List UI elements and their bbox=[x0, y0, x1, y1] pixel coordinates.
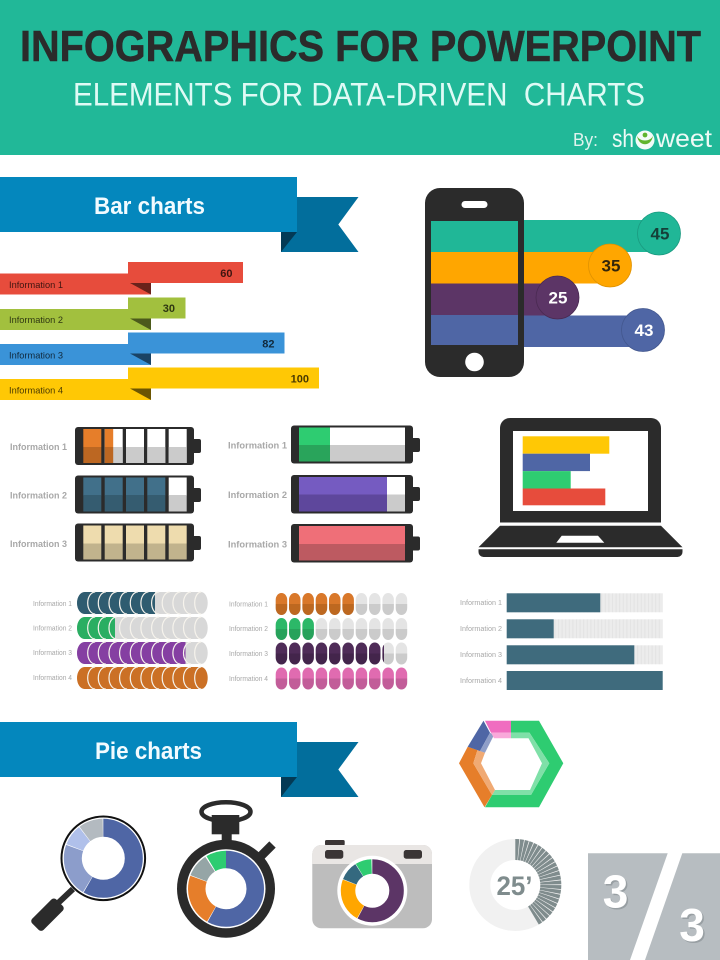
segment: orange bbox=[459, 747, 495, 807]
value 25: 25 bbox=[549, 288, 567, 308]
bar row 4 bbox=[507, 671, 663, 690]
label: Information 2 bbox=[33, 626, 72, 632]
label: Information 2 bbox=[460, 626, 502, 633]
cylinder row 2 bbox=[77, 617, 208, 639]
pill progress bars bbox=[229, 593, 407, 690]
byline: By: bbox=[573, 130, 598, 150]
label: Information 2 bbox=[228, 490, 287, 501]
bar: Information 3: Information 3 bbox=[9, 350, 63, 362]
pill row 1 bbox=[276, 593, 407, 615]
label: Information 1 bbox=[10, 442, 68, 453]
camera top button bbox=[325, 840, 345, 846]
bar: Information 4: 100 bbox=[291, 374, 309, 386]
lens bbox=[62, 816, 145, 900]
label: Information 1 bbox=[460, 600, 502, 607]
value 43 bbox=[622, 308, 664, 352]
phone body bbox=[425, 188, 524, 377]
lens ring bbox=[337, 856, 407, 926]
header band bbox=[0, 0, 720, 155]
stopwatch ring handle bbox=[202, 802, 250, 821]
bar: Information 3 bbox=[0, 332, 284, 365]
dial bbox=[186, 849, 266, 928]
battery: green bbox=[291, 426, 420, 464]
showeet logo: weet bbox=[655, 125, 712, 153]
label: Information 3 bbox=[33, 650, 72, 657]
camera donut bbox=[312, 840, 432, 928]
data bars bbox=[520, 220, 660, 347]
label: Information 3 bbox=[460, 652, 502, 659]
bar: Information 1: 60 bbox=[220, 268, 232, 280]
laptop display bbox=[513, 431, 648, 511]
battery: purple bbox=[291, 475, 420, 514]
laptop chart bbox=[478, 418, 682, 557]
page number: 3 bbox=[604, 867, 630, 919]
label: Information 3 bbox=[10, 539, 67, 550]
value 43: 43 bbox=[635, 321, 653, 340]
donut bbox=[197, 859, 255, 918]
pill row 3 bbox=[276, 642, 407, 664]
ribbon: Pie charts bbox=[0, 722, 358, 797]
segment: green bbox=[485, 721, 563, 807]
ribbon bar chart bbox=[0, 262, 319, 400]
handle bbox=[30, 889, 73, 932]
crown bbox=[212, 815, 239, 841]
battery: orange bbox=[75, 427, 201, 465]
stopwatch body bbox=[177, 840, 275, 938]
ribbon: Bar charts: Bar charts bbox=[94, 193, 205, 220]
side lever bbox=[258, 844, 272, 859]
donut bbox=[348, 866, 397, 915]
value 35 bbox=[588, 244, 632, 287]
value 45 bbox=[638, 212, 680, 255]
cylinder row 3 bbox=[77, 642, 208, 664]
ribbon: Pie charts: Pie charts bbox=[95, 738, 202, 765]
label: Information 4 bbox=[460, 678, 502, 685]
laptop base bbox=[478, 526, 682, 557]
label: Information 3 bbox=[228, 540, 287, 550]
value 35: 35 bbox=[602, 256, 620, 276]
value 45: 45 bbox=[651, 224, 669, 244]
cylinder row 1 bbox=[77, 592, 208, 614]
label: Information 3 bbox=[229, 651, 268, 658]
bar row 3 bbox=[507, 645, 663, 664]
label: Information 1 bbox=[33, 601, 72, 608]
bar: Information 2: 30 bbox=[163, 303, 175, 315]
pill row 4 bbox=[276, 668, 407, 690]
page number: 3 bbox=[679, 899, 705, 951]
bar: Information 2: Information 2 bbox=[9, 315, 63, 326]
value 25 bbox=[536, 276, 579, 319]
battery: red bbox=[291, 524, 420, 562]
label: Information 4 bbox=[33, 675, 72, 682]
showeet logo bbox=[612, 125, 712, 153]
page number: 3 bbox=[603, 866, 628, 918]
camera body bbox=[312, 845, 432, 928]
segment: pink bbox=[485, 721, 511, 738]
label: Information 4 bbox=[229, 676, 268, 683]
pill row 2 bbox=[276, 618, 407, 640]
label: Information 1 bbox=[228, 440, 288, 452]
battery: teal bbox=[75, 476, 201, 514]
horizontal progress bars bbox=[460, 593, 663, 690]
bar row 2 bbox=[507, 619, 663, 638]
bar: Information 2 bbox=[0, 298, 186, 330]
segmented batteries bbox=[10, 427, 201, 562]
ribbon: Bar charts bbox=[0, 177, 358, 252]
phone chart bbox=[425, 188, 680, 377]
screen bars bbox=[523, 436, 609, 505]
bar: Information 3: 82 bbox=[262, 338, 274, 350]
bar: Information 1 bbox=[0, 262, 243, 294]
label: Information 2 bbox=[10, 490, 67, 502]
hexagon chart bbox=[459, 721, 563, 807]
donut bbox=[73, 828, 134, 889]
cylinder row 4 bbox=[77, 667, 208, 689]
battery: sand bbox=[75, 524, 201, 562]
bar row 1 bbox=[507, 593, 663, 612]
solid batteries bbox=[228, 426, 420, 562]
segment: blue bbox=[468, 721, 494, 753]
label: Information 1 bbox=[229, 602, 268, 608]
stopwatch donut bbox=[177, 802, 275, 938]
showeet logo: sh bbox=[612, 125, 634, 153]
bar: Information 4: Information 4 bbox=[9, 386, 63, 396]
cylinder progress bars bbox=[33, 592, 208, 689]
bar: Information 4 bbox=[0, 368, 319, 400]
subtitle: ELEMENTS FOR DATA-DRIVEN CHARTS bbox=[73, 76, 645, 112]
radial gauge: 25’ bbox=[496, 871, 532, 901]
bar: Information 1: Information 1 bbox=[9, 280, 63, 291]
page number: 3 bbox=[681, 900, 706, 952]
magnifier donut bbox=[30, 816, 145, 932]
label: Information 2 bbox=[229, 626, 268, 633]
page number bbox=[588, 853, 720, 960]
laptop screen bbox=[500, 418, 661, 522]
radial gauge bbox=[480, 850, 551, 920]
